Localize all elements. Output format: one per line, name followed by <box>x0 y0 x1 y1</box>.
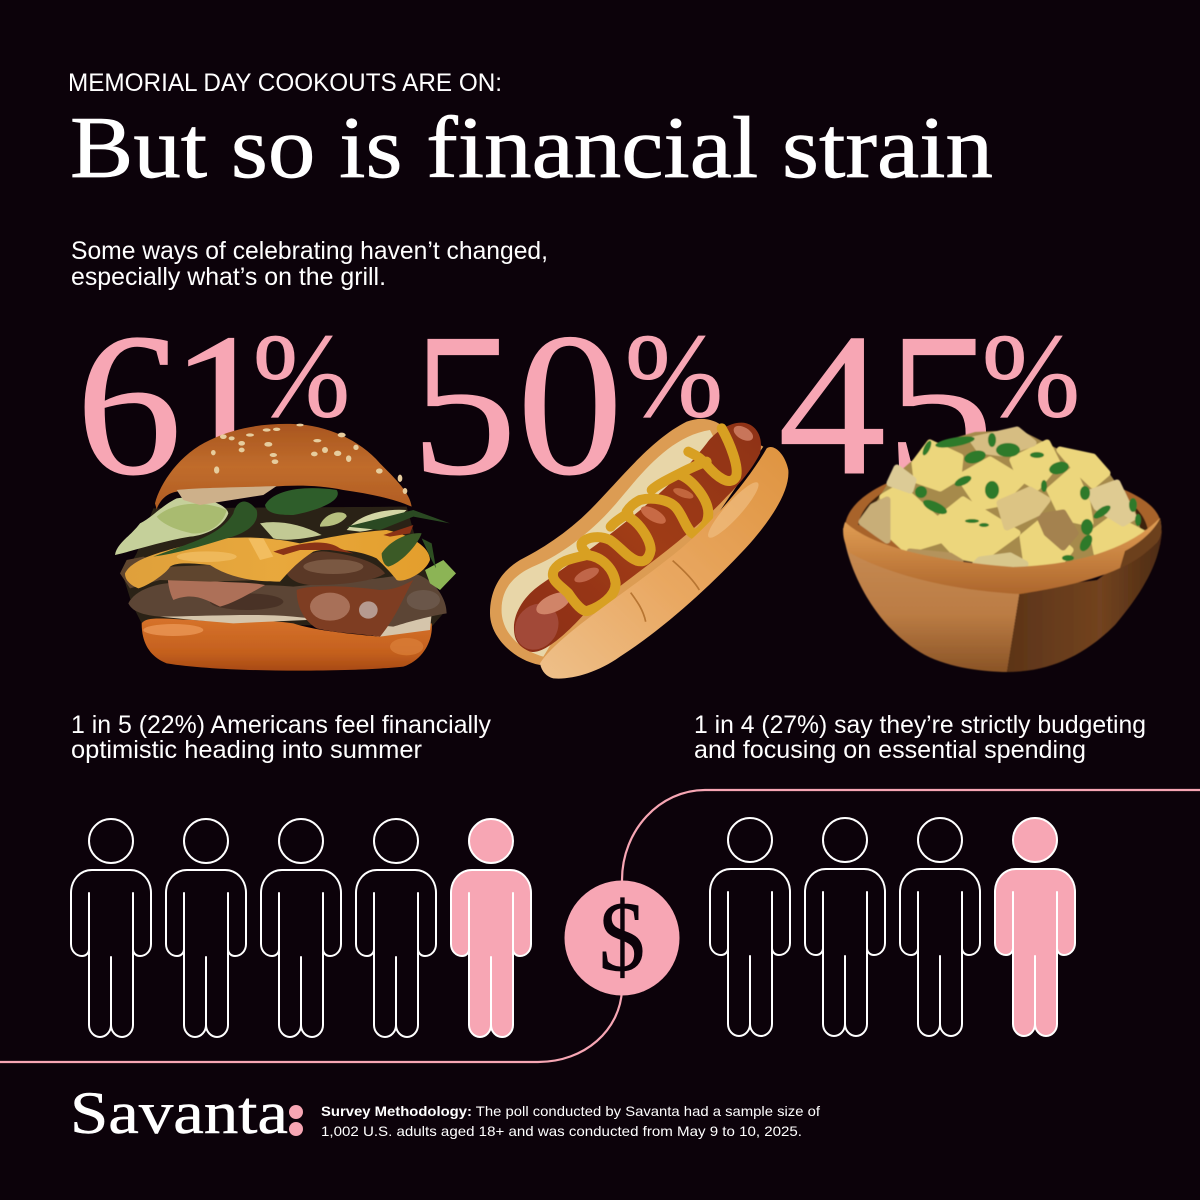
cheese <box>125 530 430 588</box>
person highlighted <box>995 818 1075 1036</box>
bacon right <box>297 580 413 637</box>
bowl front rim <box>843 518 1161 594</box>
sauce layer <box>160 613 432 637</box>
lower patty <box>128 573 447 627</box>
salad base <box>862 430 1142 568</box>
people row left: 1 in 5 <box>71 819 531 1037</box>
parsley <box>915 433 1141 561</box>
person outline <box>261 819 341 1037</box>
stat 45%: % <box>982 309 1080 442</box>
intro text <box>71 237 548 291</box>
intro text: Some ways of celebrating haven’t changed, <box>71 237 548 265</box>
bowl body left <box>843 528 1020 672</box>
survey methodology note: Survey Methodology: The poll conducted by Savanta had a sample size of <box>321 1104 820 1119</box>
caption right: and focusing on essential spending <box>694 736 1086 764</box>
lettuce <box>115 498 228 555</box>
stat 50%: 50 <box>411 292 623 518</box>
icon: dollar circle <box>564 880 680 996</box>
survey methodology note <box>321 1104 820 1139</box>
dark green leaves <box>153 502 257 557</box>
back bun crust <box>490 419 763 665</box>
caption right: 1 in 4 (27%) say they’re strictly budgeting <box>694 711 1146 739</box>
person outline <box>71 819 151 1037</box>
person outline <box>356 819 436 1037</box>
stat 61%: 1 <box>170 292 274 518</box>
survey methodology note: 1,002 U.S. adults aged 18+ and was conducted from May 9 to 10, 2025. <box>321 1124 802 1139</box>
stat 50%: % <box>625 309 723 442</box>
person outline <box>900 818 980 1036</box>
icon: dollar circle: $ <box>599 881 645 992</box>
sesame seeds <box>211 424 407 494</box>
people row right: 1 in 4 <box>710 818 1075 1036</box>
caption left: 1 in 5 (22%) Americans feel financially <box>71 711 491 739</box>
back bun crumb <box>502 430 720 657</box>
potato chunks <box>862 430 1142 565</box>
caption right <box>694 711 1146 764</box>
intro text: especially what’s on the grill. <box>71 263 386 291</box>
person outline <box>710 818 790 1036</box>
image: hot dog <box>490 419 788 679</box>
stat 50% <box>411 292 723 518</box>
stat 61%: % <box>253 309 350 442</box>
bowl body right <box>1007 530 1162 672</box>
stat 45% <box>778 292 1080 518</box>
caption left: optimistic heading into summer <box>71 736 422 764</box>
filling backing <box>123 507 443 627</box>
stat 45%: 45 <box>778 292 994 518</box>
mustard <box>553 428 737 611</box>
title: But so is financial strain <box>70 100 993 197</box>
logo: Savanta: Savanta <box>70 1080 288 1146</box>
top bun <box>155 424 412 509</box>
bacon left <box>168 568 265 607</box>
caption left <box>71 711 491 764</box>
bowl back rim <box>845 482 1161 560</box>
sausage <box>514 423 761 652</box>
connector line <box>0 790 1200 1062</box>
image: potato salad bowl <box>843 430 1162 672</box>
upper patty <box>287 551 385 585</box>
stat 61%: 6 <box>76 292 182 518</box>
bottom bun <box>142 619 432 671</box>
stat 61% <box>76 292 350 518</box>
person outline <box>805 818 885 1036</box>
person highlighted <box>451 819 531 1037</box>
image: burger <box>115 424 456 671</box>
person outline <box>166 819 246 1037</box>
eyebrow heading: MEMORIAL DAY COOKOUTS ARE ON: <box>68 69 502 97</box>
front bun <box>540 447 788 679</box>
